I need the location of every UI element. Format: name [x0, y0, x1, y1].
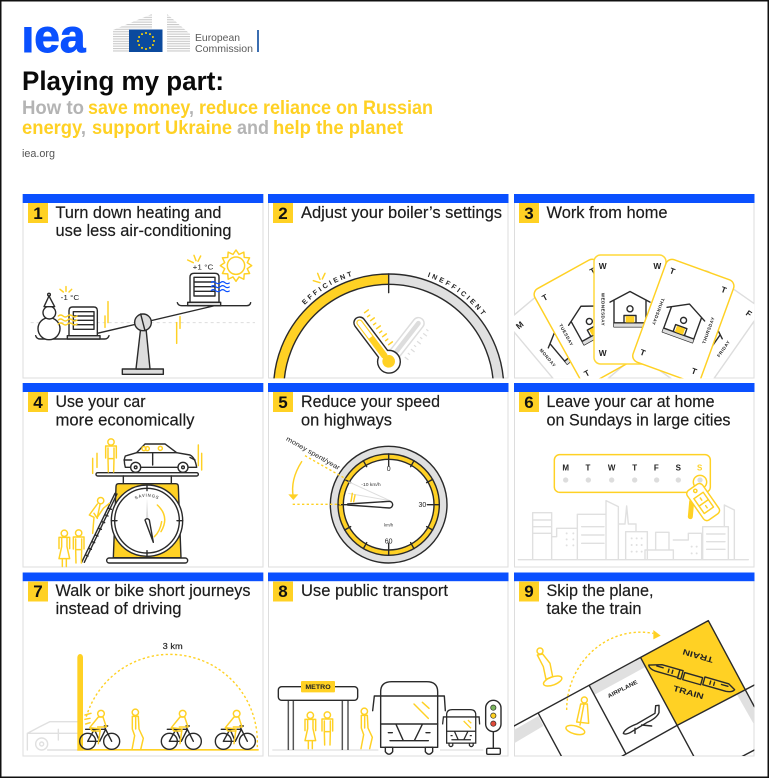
train label bottom: TRAIN	[672, 684, 705, 701]
left heater and snowman: -1 °C	[61, 293, 80, 302]
playing cards illustration	[514, 254, 754, 378]
subtitle: and	[237, 117, 269, 139]
label: inefficient: INEFFICIENT	[428, 272, 486, 314]
card: Wednesday: W	[599, 261, 607, 271]
panel 6: car-free Sundays	[514, 383, 754, 567]
panel 9: plane vs train: 9	[524, 582, 534, 601]
panel 6: car-free Sundays: 6	[524, 393, 534, 412]
panel 8: public transport: 8	[278, 582, 288, 601]
panel 1: heating	[23, 194, 263, 378]
car key	[685, 475, 721, 522]
card: Tuesday: T	[582, 368, 591, 379]
subtitle	[22, 97, 433, 139]
heading 2: Adjust your boiler’s settings	[301, 204, 502, 222]
heading 7: Walk or bike short journeys	[56, 582, 250, 600]
yellow thermometer	[353, 309, 401, 374]
week calendar: S	[676, 464, 682, 473]
metro shelter: METRO	[305, 684, 331, 691]
card: Monday: M	[514, 319, 525, 331]
card: Thursday: THURSDAY	[651, 298, 665, 326]
heading 8: Use public transport	[301, 582, 448, 600]
seesaw illustration	[31, 250, 255, 374]
logo: European Commission: Commission	[195, 43, 253, 55]
panel 3: work from home	[514, 194, 754, 378]
pawn: woman	[565, 697, 589, 736]
card: Monday	[514, 298, 624, 378]
panel 3: work from home: 3	[524, 204, 534, 223]
reduction label: -10 km/h	[361, 482, 381, 488]
dial numbers	[385, 466, 426, 546]
card: Thursday: T	[668, 265, 677, 277]
panel 2: boiler: 2	[278, 204, 288, 223]
transport illustration	[272, 681, 501, 754]
panel 8: public transport	[268, 572, 508, 756]
board game illustration	[514, 621, 754, 757]
right heater and sun	[188, 250, 252, 306]
week calendar: T	[586, 464, 591, 473]
subtitle: save money,	[88, 97, 194, 119]
people waiting	[305, 708, 372, 749]
panel 4: car economy	[22, 383, 264, 568]
heading 9: Skip the plane,	[546, 582, 654, 600]
card: Friday	[660, 270, 754, 378]
logo: European Commission	[113, 14, 259, 55]
panel 4: car economy: 4	[33, 393, 43, 412]
panel 7: walk or bike: 7	[33, 582, 43, 601]
card: Friday: FRIDAY	[716, 339, 731, 358]
car	[124, 444, 197, 472]
money label: money spent/year	[285, 436, 342, 472]
card: Wednesday: W	[653, 261, 661, 271]
week calendar: W	[608, 464, 616, 473]
card: Thursday: THURSDAY	[701, 316, 716, 344]
heading 6: Leave your car at home	[546, 393, 714, 411]
distance illustration	[27, 642, 259, 751]
city and key illustration	[518, 455, 748, 560]
week calendar: M	[562, 464, 569, 473]
right heater and sun: +1 °C	[193, 262, 214, 271]
large bus	[373, 682, 445, 754]
subtitle: How to	[22, 97, 84, 119]
pawn: man	[537, 648, 563, 688]
card: Tuesday	[533, 258, 627, 378]
week calendar: F	[654, 464, 659, 473]
scale illustration	[58, 438, 202, 568]
grey thermometer	[390, 317, 429, 360]
subtitle: support Ukraine	[92, 117, 232, 139]
dial numbers: 0	[387, 466, 391, 473]
week calendar	[554, 455, 710, 492]
panel 9: plane vs train	[514, 572, 754, 757]
card: Monday: MONDAY	[539, 348, 557, 368]
dial label: SAVINGS	[134, 494, 159, 500]
dial numbers: 60	[385, 539, 393, 546]
card: Thursday: T	[690, 365, 698, 377]
heading 4	[56, 393, 195, 430]
logo: European Commission: European	[195, 32, 240, 44]
subtitle: reduce reliance on Russian	[199, 97, 433, 119]
ladder	[82, 493, 117, 562]
card: Tuesday: T	[588, 265, 597, 276]
heading 1: use less air-conditioning	[56, 222, 232, 240]
title: Playing my part:	[22, 66, 224, 96]
week calendar: S	[697, 464, 703, 473]
speedometer illustration	[285, 436, 447, 563]
dial numbers: 30	[418, 502, 426, 509]
card: Friday: F	[744, 308, 754, 319]
airplane label: AIRPLANE	[607, 680, 639, 700]
left heater and snowman	[38, 287, 100, 340]
heading 6: on Sundays in large cities	[546, 412, 730, 430]
grey car	[27, 722, 77, 750]
subtitle: help the planet	[273, 117, 403, 139]
heading 5: on highways	[301, 412, 392, 430]
logo: IEA: iea	[22, 10, 86, 62]
week calendar: T	[632, 464, 637, 473]
card: Tuesday: T	[540, 292, 549, 303]
airplane	[623, 705, 659, 734]
card: Tuesday: TUESDAY	[558, 323, 574, 347]
card: Wednesday: WEDNESDAY	[601, 293, 606, 326]
cyclists and walker	[80, 709, 255, 750]
distance label: 3 km	[163, 642, 183, 651]
small bus	[443, 710, 480, 747]
card: Wednesday	[594, 255, 666, 364]
train label top: TRAIN	[681, 647, 714, 664]
panel 5: speed: 5	[278, 393, 288, 412]
people	[59, 439, 116, 567]
heading 9	[546, 582, 654, 618]
metro shelter	[278, 681, 358, 750]
heading 3: Work from home	[546, 204, 668, 222]
source link: iea.org	[22, 148, 55, 160]
card: Thursday: T	[639, 347, 647, 358]
panel 7: walk or bike	[23, 572, 263, 756]
panel 2: boiler	[268, 194, 508, 378]
heading 9: take the train	[546, 600, 642, 618]
card: Wednesday: W	[599, 348, 607, 358]
card: Thursday	[631, 257, 736, 385]
dial unit: km/h	[384, 523, 394, 528]
panel 1: heating: 1	[33, 204, 43, 223]
heading 5	[301, 393, 440, 430]
card: Thursday: T	[720, 284, 728, 295]
panel 5: speed	[268, 383, 508, 567]
heading 4: Use your car	[56, 393, 146, 411]
heading 7: instead of driving	[56, 600, 182, 618]
traffic light	[486, 700, 501, 754]
heading 7	[56, 582, 250, 618]
heading 1: Turn down heating and	[56, 204, 222, 222]
train	[648, 664, 736, 692]
subtitle: energy,	[22, 117, 86, 139]
heading 6	[546, 393, 730, 430]
label: efficient: EFFICIENT	[302, 271, 351, 305]
gauge illustration	[273, 271, 504, 378]
skyline	[518, 501, 748, 560]
heading 4: more economically	[56, 412, 195, 430]
heading 1	[56, 204, 232, 240]
heading 5: Reduce your speed	[301, 393, 440, 411]
